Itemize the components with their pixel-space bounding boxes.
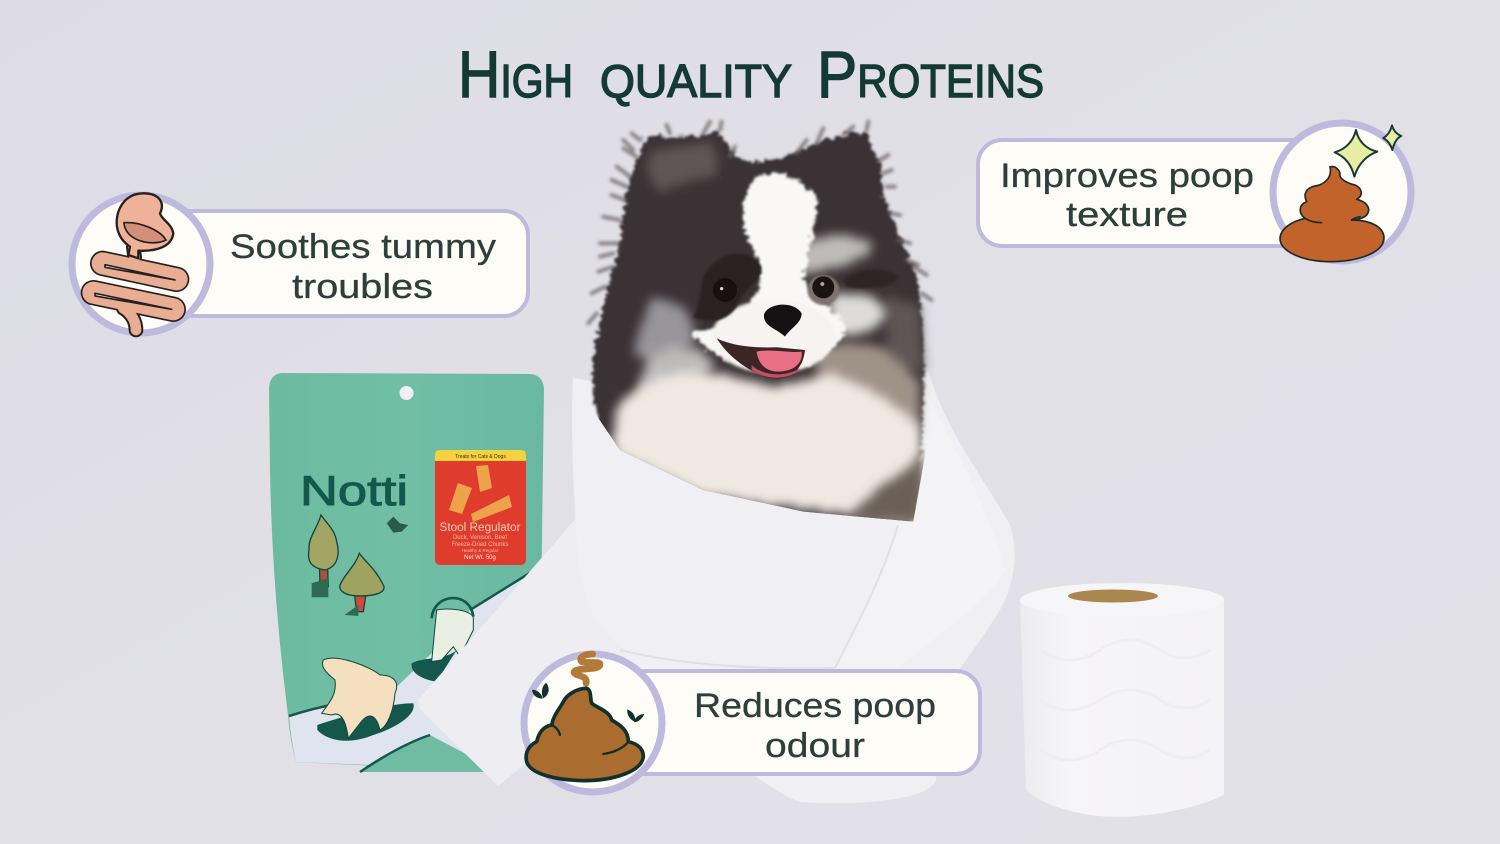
bag brand name: Notti — [300, 467, 408, 514]
skateboard dog — [317, 658, 414, 741]
callout circle — [1273, 123, 1411, 261]
tree two — [340, 553, 384, 616]
paper fold bright — [835, 390, 1005, 668]
dog right eye — [807, 275, 839, 305]
dog — [588, 122, 932, 523]
dog under eye right — [827, 294, 887, 336]
intestine tube — [93, 247, 177, 330]
intestine slit two — [95, 293, 172, 309]
intestine slit one — [105, 265, 175, 280]
callout circle — [72, 195, 210, 333]
poop shape — [526, 688, 643, 781]
poop creases — [552, 725, 628, 754]
large sparkle — [1335, 130, 1377, 177]
label flavours: Duck, Venison, Beef — [453, 535, 507, 541]
bag illustrations — [309, 515, 473, 741]
roll top — [1020, 583, 1224, 617]
icon: sparkly poop — [1280, 125, 1401, 262]
neck and tail outline — [123, 247, 136, 330]
dog dark coat — [593, 130, 924, 523]
dog grey brow right — [797, 235, 873, 277]
stomach — [117, 193, 173, 258]
dog hair wisps — [588, 122, 932, 323]
stomach inner — [124, 223, 166, 243]
dog left eye patch — [693, 254, 762, 321]
butterfly — [387, 517, 408, 533]
paper tail strip — [418, 516, 660, 786]
text line one: Improves poop — [1000, 157, 1254, 195]
dog nose — [764, 305, 802, 337]
label yellow band — [435, 450, 526, 461]
text line two: texture — [1066, 196, 1188, 234]
icon: intestine — [93, 193, 177, 330]
text line two: odour — [765, 727, 865, 765]
neck and tail fill — [123, 247, 136, 330]
label tagline: Healthy & Regular — [462, 548, 499, 553]
dog lower right dark — [847, 453, 923, 523]
treat one — [449, 483, 472, 514]
roll cardboard core — [1068, 590, 1158, 602]
dog left eye — [713, 278, 737, 302]
tree two trunk — [354, 593, 366, 612]
stink wisp — [574, 654, 600, 683]
title — [458, 37, 1044, 111]
dog grey right side — [887, 293, 923, 373]
dog skateboard — [317, 703, 414, 741]
callout panel — [978, 140, 1318, 246]
dog body — [322, 658, 397, 738]
callout text — [230, 228, 496, 306]
label net weight: Net Wt. 50g — [464, 555, 496, 561]
label red panel — [435, 450, 526, 565]
dog lower lip — [752, 365, 800, 378]
title word two: QUALITY — [600, 55, 792, 107]
right eyeball — [812, 276, 834, 298]
dog grey left cheek — [633, 299, 694, 360]
callout: reduces poop odour — [524, 654, 980, 792]
dog left lower grey — [633, 346, 717, 400]
dog cream chest — [613, 372, 923, 523]
callout panel — [620, 671, 980, 774]
title word one: HIGH — [458, 37, 573, 111]
text line one: Soothes tummy — [230, 228, 496, 266]
dog beige shoulder — [813, 343, 920, 430]
text line two: troubles — [292, 268, 433, 306]
callout circle — [524, 654, 662, 792]
bag wave panel — [289, 566, 541, 772]
skateboard cat — [412, 598, 473, 682]
tree two grass — [344, 605, 358, 616]
poop crease — [1305, 217, 1360, 223]
cat headphones — [432, 598, 473, 618]
bag wave line — [289, 566, 541, 772]
left eye glint — [720, 287, 723, 290]
label treats — [449, 465, 512, 522]
bag lower green band — [360, 735, 500, 772]
treat two — [476, 465, 492, 492]
paper fold crease — [620, 525, 898, 668]
intestine outline — [93, 247, 177, 330]
text line one: Reduces poop — [694, 687, 936, 725]
cat board — [412, 650, 457, 682]
label small heading: Treats for Cats & Dogs — [455, 454, 506, 460]
small sparkle — [1383, 125, 1401, 150]
left leaf marks — [532, 683, 549, 699]
bag label — [435, 450, 526, 565]
left eyeball — [713, 278, 737, 302]
tree one — [309, 515, 338, 597]
callout: soothes tummy troubles — [72, 193, 528, 333]
upper loop outline — [103, 263, 177, 279]
tree one grass — [312, 578, 328, 597]
dog mouth — [717, 338, 805, 378]
right eye glint — [820, 282, 824, 286]
bag hang hole — [400, 386, 414, 400]
dog tongue — [757, 350, 802, 372]
label product title: Stool Regulator — [440, 522, 521, 534]
poop shape — [1280, 167, 1384, 262]
roll emboss pattern — [1040, 640, 1210, 760]
tree one crown — [309, 515, 338, 570]
right leaf marks — [627, 709, 644, 722]
lower loop fill — [93, 293, 173, 309]
dog ear lighter left — [649, 142, 718, 192]
upper loop fill — [103, 263, 177, 279]
dog white blaze — [693, 174, 847, 370]
paper main wrap — [572, 370, 1015, 803]
dog right eye patch — [843, 270, 898, 288]
bag pouch — [269, 373, 544, 772]
cat body — [432, 609, 473, 662]
right eye surround — [807, 275, 839, 305]
toilet roll — [1020, 583, 1224, 817]
roll body — [1020, 589, 1224, 817]
icon: smelly poop — [526, 654, 644, 781]
dog white muzzle — [712, 300, 835, 373]
callout: improves poop texture — [978, 123, 1411, 262]
treat three — [471, 495, 512, 522]
title word three: PROTEINS — [817, 37, 1044, 111]
lower loop outline — [93, 293, 173, 309]
callout text — [694, 687, 936, 765]
callout text — [1000, 157, 1254, 234]
callout panel — [160, 211, 528, 316]
product bag — [269, 373, 544, 772]
paper wrap around dog — [572, 370, 1015, 803]
tree two crown — [340, 553, 384, 596]
tree one trunk — [319, 560, 328, 587]
label format: Freeze-Dried Chunks — [451, 542, 509, 548]
